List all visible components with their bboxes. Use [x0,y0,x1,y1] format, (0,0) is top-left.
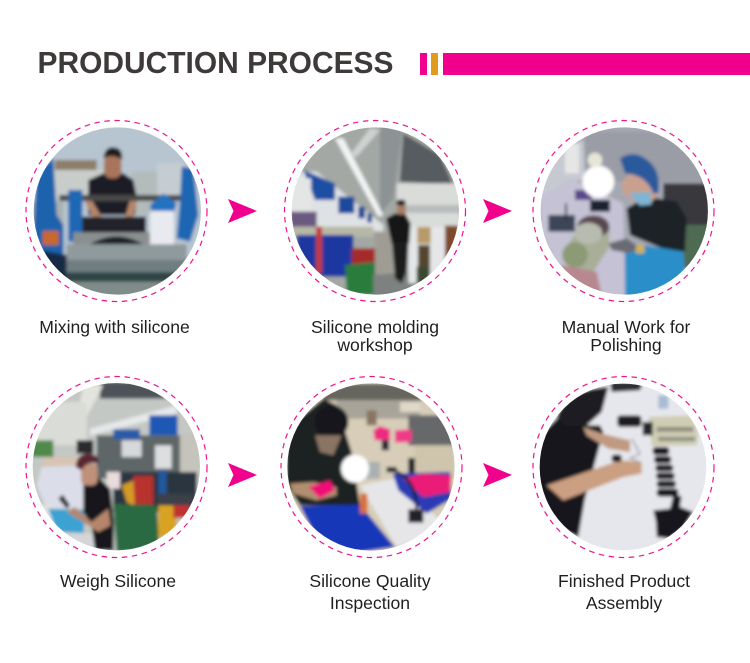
label: finished product assembly [558,571,690,613]
photo: assembly at bench [537,382,713,555]
dashed ring [533,120,714,302]
dashed ring [533,376,714,558]
label: silicone quality inspection [309,571,431,613]
arrow 2 [483,199,512,223]
arrow 3 [228,463,257,487]
step 1: mixing with silicone [26,120,207,302]
dashed ring [26,376,207,558]
step 3: manual work for polishing [533,120,714,302]
photo: quality inspection [287,382,457,555]
label: silicone molding workshop [311,317,439,355]
step 5: silicone quality inspection [281,376,462,558]
step 4: weigh silicone [26,376,207,558]
header accent bars [420,53,750,75]
photo: worker at mixing mill [30,125,207,298]
title: PRODUCTION PROCESS [38,46,394,80]
label: silicone quality inspection: Silicone Quality [309,571,431,591]
arrow 1 [228,199,257,223]
dashed ring [284,120,466,302]
step 2: silicone molding workshop [284,120,466,302]
step 6: finished product assembly [533,376,714,558]
photo: worker weighing silicone [30,382,207,555]
label: silicone molding workshop: Silicone molding [311,317,439,337]
label: manual work for polishing: Polishing [590,335,662,355]
photo: worker polishing [537,125,713,298]
label: manual work for polishing [562,317,691,355]
label: finished product assembly: Assembly [586,593,662,613]
label: mixing with silicone: Mixing with silicone [39,317,190,337]
label: silicone molding workshop: workshop [336,335,413,355]
label: weigh silicone: Weigh Silicone [60,571,176,591]
dashed ring [281,376,462,558]
arrow 4 [483,463,512,487]
label: manual work for polishing: Manual Work for [562,317,691,337]
dashed ring [26,120,207,302]
label: silicone quality inspection: Inspection [330,593,410,613]
photo: molding workshop [290,125,463,298]
label: finished product assembly: Finished Product [558,571,690,591]
